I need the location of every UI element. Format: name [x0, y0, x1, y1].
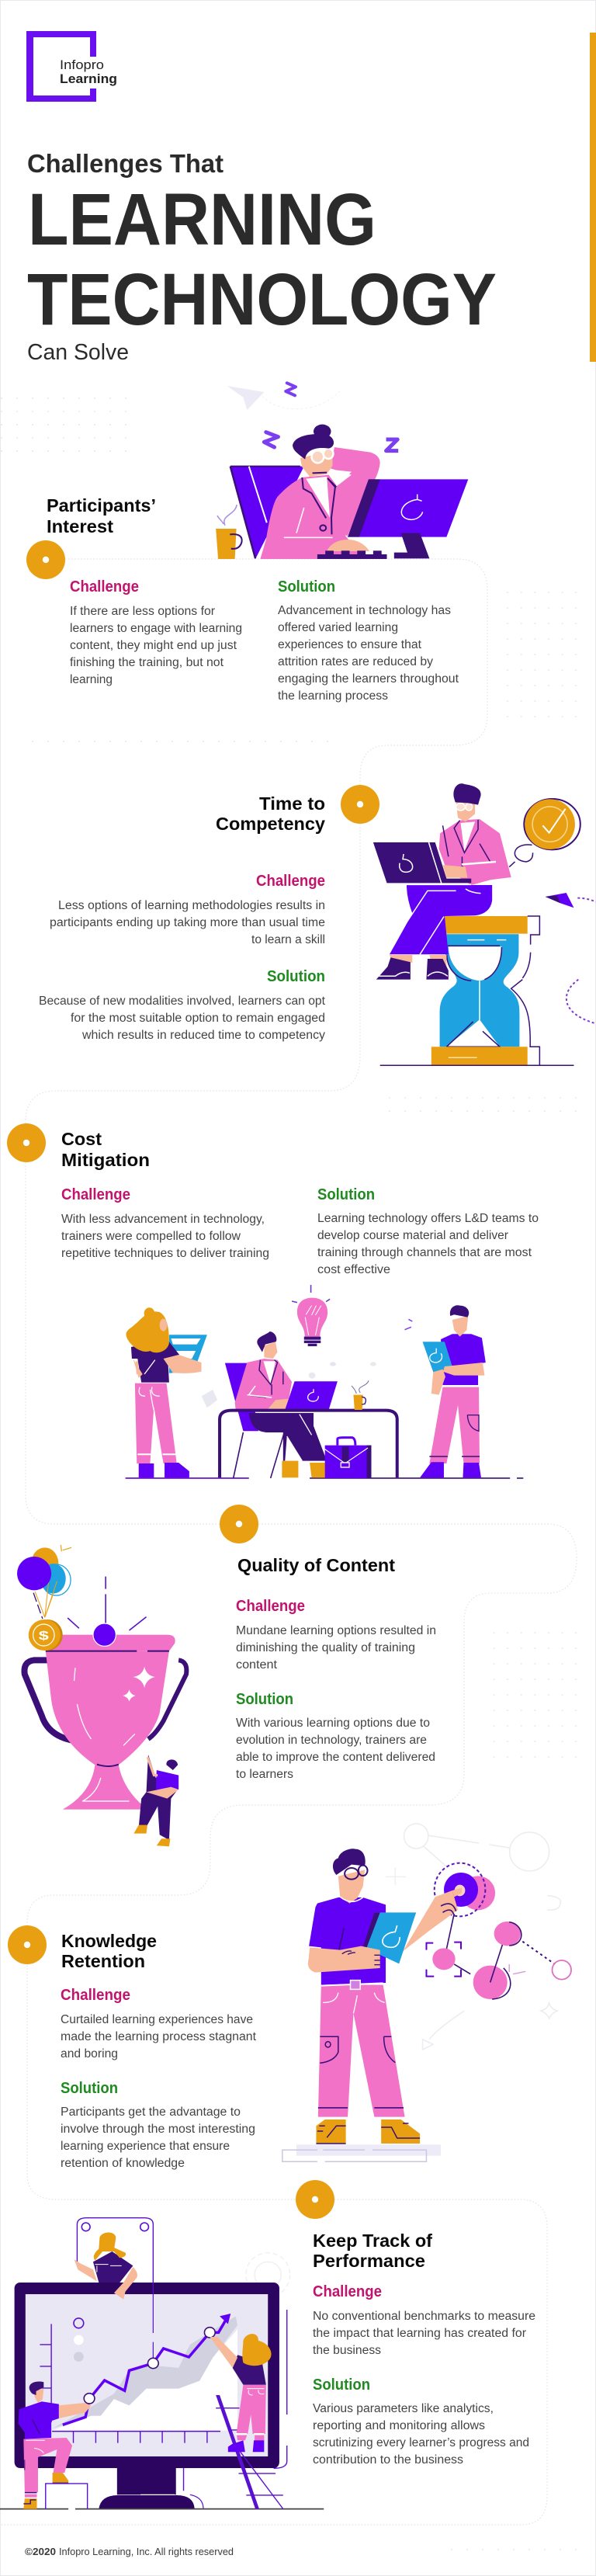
solution text 6: reporting and monitoring allows	[313, 2419, 485, 2432]
challenge text 2: to learn a skill	[251, 933, 325, 946]
section 4 marker	[220, 1505, 258, 1543]
challenge text 1: content, they might end up just	[70, 639, 237, 652]
solution text 3: Learning technology offers L&D teams to	[317, 1212, 539, 1225]
solution text 1: the learning process	[278, 689, 388, 703]
challenge text 4: Mundane learning options resulted in	[236, 1624, 436, 1637]
illustration: man on hourglass	[373, 783, 596, 1065]
challenge text 5: Curtailed learning experiences have	[61, 2013, 253, 2026]
challenge text 5: made the learning process stagnant	[61, 2030, 257, 2043]
challenge text 6: No conventional benchmarks to measure	[313, 2310, 535, 2323]
solution text 1: engaging the learners throughout	[278, 672, 459, 686]
solution text 1: Advancement in technology has	[278, 604, 451, 617]
section 1 marker	[26, 540, 65, 579]
challenge text 6: the business	[313, 2344, 381, 2357]
solution text 4	[236, 1691, 435, 1781]
heading: Keep Track of Performance: Keep Track of	[313, 2231, 432, 2251]
heading: Time to Competency: Competency	[216, 814, 325, 834]
solution text 3: develop course material and deliver	[317, 1229, 508, 1242]
heading: Quality of Content: Quality of Content	[237, 1555, 395, 1575]
title: Challenges That	[27, 149, 224, 178]
section 5 marker	[8, 1925, 47, 1964]
challenge text 6: Challenge	[313, 2283, 382, 2300]
solution text 3: cost effective	[317, 1263, 390, 1276]
challenge text 4: content	[236, 1658, 278, 1672]
illustration: team at desk	[126, 1285, 523, 1478]
title	[27, 149, 497, 365]
challenge text 3: trainers were compelled to follow	[61, 1230, 241, 1243]
challenge text 6	[313, 2283, 535, 2357]
heading: Cost Mitigation: Cost	[61, 1129, 102, 1149]
heading: Keep Track of Performance: Performance	[313, 2251, 425, 2271]
solution text 1: experiences to ensure that	[278, 638, 422, 651]
solution text 2: which results in reduced time to competency	[81, 1029, 325, 1042]
solution text 1	[278, 578, 459, 703]
challenge text 5: and boring	[61, 2047, 118, 2060]
footer: ©2020	[25, 2546, 56, 2557]
solution text 3: Solution	[317, 1186, 375, 1203]
solution text 3	[317, 1186, 539, 1276]
dotted connector path	[0, 559, 577, 2525]
logo	[26, 31, 117, 102]
solution text 1: offered varied learning	[278, 621, 398, 634]
solution text 6	[313, 2376, 529, 2467]
solution text 2	[39, 968, 326, 1042]
solution text 6: Solution	[313, 2376, 370, 2394]
solution text 3: training through channels that are most	[317, 1246, 532, 1259]
section 3 marker	[7, 1123, 46, 1162]
challenge text 2: participants ending up taking more than usual time	[50, 916, 325, 929]
challenge text 4: diminishing the quality of training	[236, 1641, 415, 1654]
heading: Cost Mitigation	[61, 1129, 150, 1170]
heading: Participants' Interest	[47, 495, 156, 536]
challenge text 1: Challenge	[70, 578, 139, 595]
heading: Time to Competency: Time to	[259, 793, 325, 814]
solution text 4: Solution	[236, 1691, 293, 1708]
challenge text 3: With less advancement in technology,	[61, 1213, 265, 1226]
solution text 2: Solution	[267, 968, 325, 985]
solution text 5	[61, 2080, 255, 2170]
accent bar	[590, 33, 596, 362]
challenge text 4: Challenge	[236, 1598, 305, 1615]
illustration: trophy and balloons: $	[39, 1629, 49, 1643]
challenge text 2: Less options of learning methodologies results in	[58, 899, 325, 912]
solution text 6: scrutinizing every learner’s progress and	[313, 2436, 529, 2449]
heading: Cost Mitigation: Mitigation	[61, 1150, 150, 1170]
solution text 4: able to improve the content delivered	[236, 1751, 435, 1764]
solution text 2: Because of new modalities involved, learners can opt	[39, 995, 326, 1008]
solution text 5: retention of knowledge	[61, 2157, 185, 2170]
illustration: monitor with growth chart and people	[0, 2218, 324, 2509]
heading: Time to Competency	[216, 793, 325, 834]
challenge text 6: the impact that learning has created for	[313, 2327, 526, 2340]
challenge text 3: repetitive techniques to deliver training	[61, 1247, 269, 1260]
challenge text 3: Challenge	[61, 1186, 130, 1203]
challenge text 1: learning	[70, 673, 113, 686]
heading: Participants' Interest: Participants’	[47, 495, 156, 516]
solution text 2: for the most suitable option to remain engaged	[71, 1012, 325, 1025]
challenge text 4	[236, 1598, 436, 1672]
challenge text 1: finishing the training, but not	[70, 656, 224, 669]
title: LEARNING	[28, 179, 376, 261]
heading: Participants' Interest: Interest	[47, 516, 113, 536]
solution text 5: Participants get the advantage to	[61, 2106, 241, 2119]
solution text 5: Solution	[61, 2080, 118, 2097]
section 2 marker	[341, 785, 379, 824]
solution text 1: attrition rates are reduced by	[278, 655, 433, 668]
solution text 5: involve through the most interesting	[61, 2123, 255, 2136]
solution text 1: Solution	[278, 578, 335, 595]
solution text 5: learning experience that ensure	[61, 2140, 230, 2153]
logo: Infopro	[60, 57, 104, 72]
solution text 4: evolution in technology, trainers are	[236, 1734, 427, 1747]
solution text 6: contribution to the business	[313, 2453, 463, 2467]
footer: Infopro Learning, Inc. All rights reserved	[59, 2546, 234, 2557]
challenge text 5: Challenge	[61, 1987, 130, 2004]
title: Can Solve	[27, 340, 129, 365]
illustration: trophy and balloons	[17, 1545, 549, 1871]
logo: Learning	[60, 71, 117, 86]
challenge text 2	[50, 873, 325, 946]
solution text 6: Various parameters like analytics,	[313, 2402, 494, 2415]
challenge text 1	[70, 578, 242, 686]
challenge text 2: Challenge	[256, 873, 325, 890]
challenge text 1: learners to engage with learning	[70, 622, 242, 635]
challenge text 1: If there are less options for	[70, 605, 215, 618]
heading: Knowledge Retention: Knowledge	[61, 1931, 157, 1951]
illustration: bored woman at desk	[216, 383, 468, 559]
illustration: man touching network	[282, 1849, 571, 2161]
section 6 marker	[296, 2180, 334, 2219]
challenge text 3	[61, 1186, 269, 1260]
challenge text 5	[61, 1987, 257, 2060]
title: TECHNOLOGY	[27, 259, 497, 341]
heading: Knowledge Retention: Retention	[61, 1951, 145, 1971]
solution text 4: to learners	[236, 1768, 293, 1781]
heading: Knowledge Retention	[61, 1931, 157, 1971]
solution text 4: With various learning options due to	[236, 1717, 430, 1730]
heading: Keep Track of Performance	[313, 2231, 432, 2271]
